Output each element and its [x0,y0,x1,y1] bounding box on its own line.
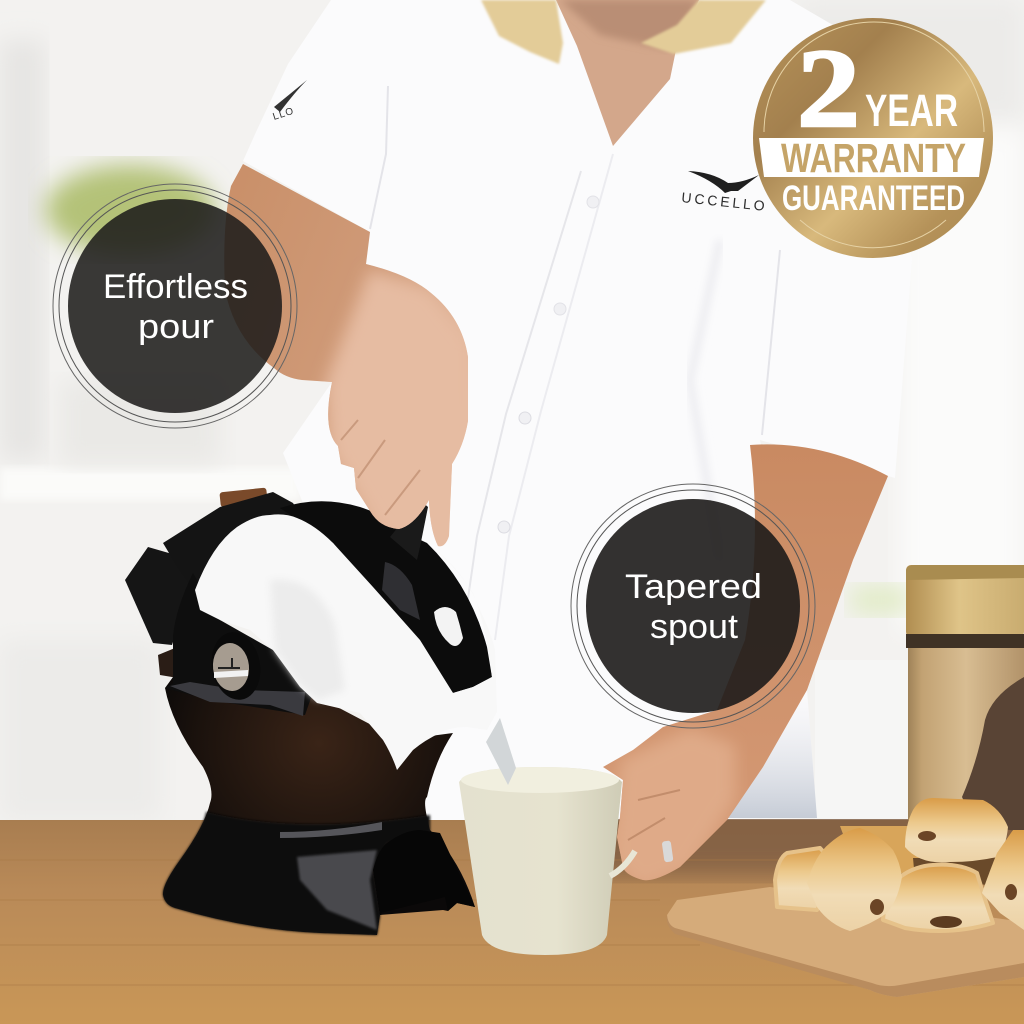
callout: effortless pour: Effortless [103,268,248,306]
lid button [434,607,463,646]
callout: effortless pour: pour [138,308,214,346]
handle [390,500,428,560]
shirt [243,0,912,822]
mug [459,767,635,955]
top band [163,492,310,605]
badge year: YEAR [865,85,958,136]
neck [556,0,699,146]
scones [775,798,1024,931]
badge warranty: WARRANTY [781,135,966,181]
mid frame [165,573,312,715]
water stream [486,718,516,785]
callout: tapered spout: Tapered [625,568,762,606]
wood piece [219,488,268,507]
badge 2: 2 [797,27,860,151]
callout: tapered spout [571,484,815,728]
chopping board [667,887,1024,997]
rear handle block [125,547,193,645]
dial [206,628,266,704]
hair [481,0,766,64]
bread loaf [962,677,1024,832]
left arm and hand [224,164,470,560]
shirt logo [681,171,768,214]
badge ribbon [759,138,984,177]
callout: effortless pour [53,184,297,428]
wooden counter [0,819,1024,1024]
sleeve logo: LLO [272,106,296,123]
right arm and hand [603,444,888,890]
badge guaranteed: GUARANTEED [782,179,965,218]
white kettle body [195,514,497,770]
kettle base [163,640,475,935]
callout: tapered spout: spout [650,608,739,646]
sleeve logo [272,80,307,123]
gold jar [906,565,1024,820]
shirt logo: UCCELLO [681,189,768,214]
warranty badge [753,18,993,258]
kettle [125,488,516,935]
upper black kettle [280,501,492,693]
